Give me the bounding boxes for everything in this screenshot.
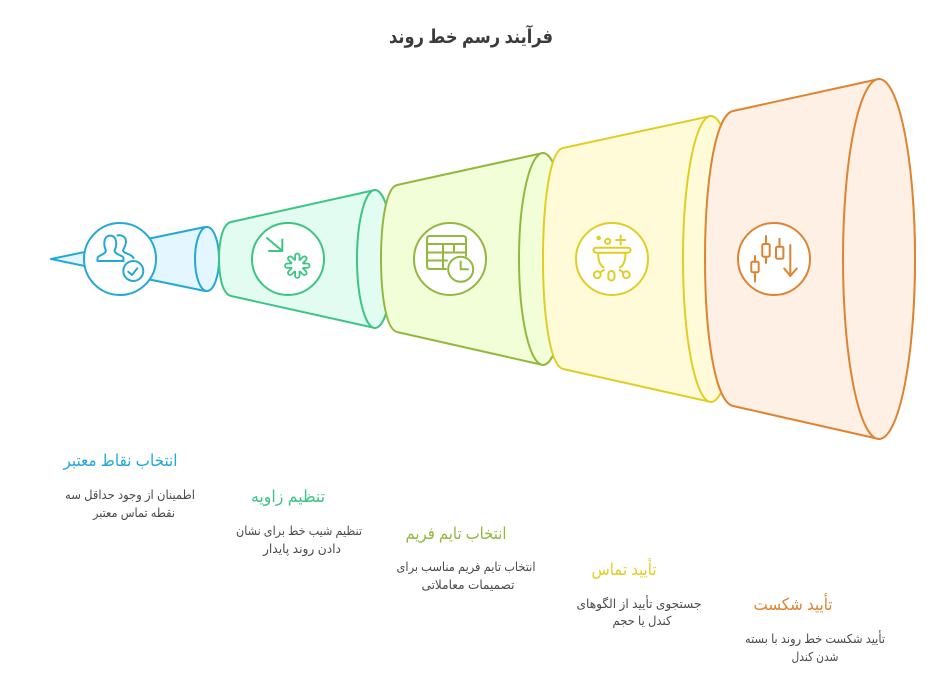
step 1 label: select valid points: انتخاب نقاط معتبر — [63, 452, 178, 471]
icon: users with check — [84, 223, 156, 295]
step 5 label: confirm breakout: شدن کندل — [792, 650, 838, 664]
funnel segment 5: orange — [705, 79, 915, 439]
step 3 label: select timeframe: تصمیمات معاملاتی — [422, 578, 515, 592]
icon: cauldron — [576, 223, 648, 295]
step 3 label: select timeframe: انتخاب تایم فریم — [406, 525, 506, 544]
step 4 label: confirm touch: تأیید تماس — [592, 558, 657, 579]
step 2 label: adjust angle: تنظیم شیب خط برای نشان — [236, 524, 362, 539]
icon: timeframe table with clock — [414, 223, 486, 295]
step 5 label: confirm breakout — [745, 593, 885, 664]
icon: candlesticks with down arrow — [738, 223, 810, 295]
icon: angle arrow and burst — [252, 223, 324, 295]
step 4 label: confirm touch — [576, 558, 702, 629]
step 1 label: select valid points: نقطه تماس معتبر — [92, 506, 175, 521]
funnel segment 2: green — [219, 190, 393, 328]
step 2 label: adjust angle — [236, 488, 362, 557]
step 2 label: adjust angle: تنظیم زاویه — [251, 488, 325, 507]
title: فرآیند رسم خط روند — [389, 24, 553, 48]
step 5 label: confirm breakout: تأیید شکست خط روند با بسته — [745, 630, 885, 647]
step 1 label: select valid points — [63, 452, 195, 521]
step 4 label: confirm touch: کندل یا حجم — [612, 614, 672, 629]
funnel segment 4: yellow — [543, 116, 739, 402]
step 5 label: confirm breakout: تأیید شکست — [754, 593, 833, 614]
step 4 label: confirm touch: جستجوی تأیید از الگوهای — [576, 595, 702, 612]
funnel segment 1: blue — [51, 227, 219, 291]
step 3 label: select timeframe — [396, 525, 536, 592]
step 1 label: select valid points: اطمینان از وجود حداقل سه — [65, 488, 195, 503]
step 2 label: adjust angle: دادن روند پایدار — [262, 542, 341, 557]
funnel segment 3: olive — [381, 153, 567, 365]
step 3 label: select timeframe: انتخاب تایم فریم مناسب برای — [396, 560, 536, 575]
